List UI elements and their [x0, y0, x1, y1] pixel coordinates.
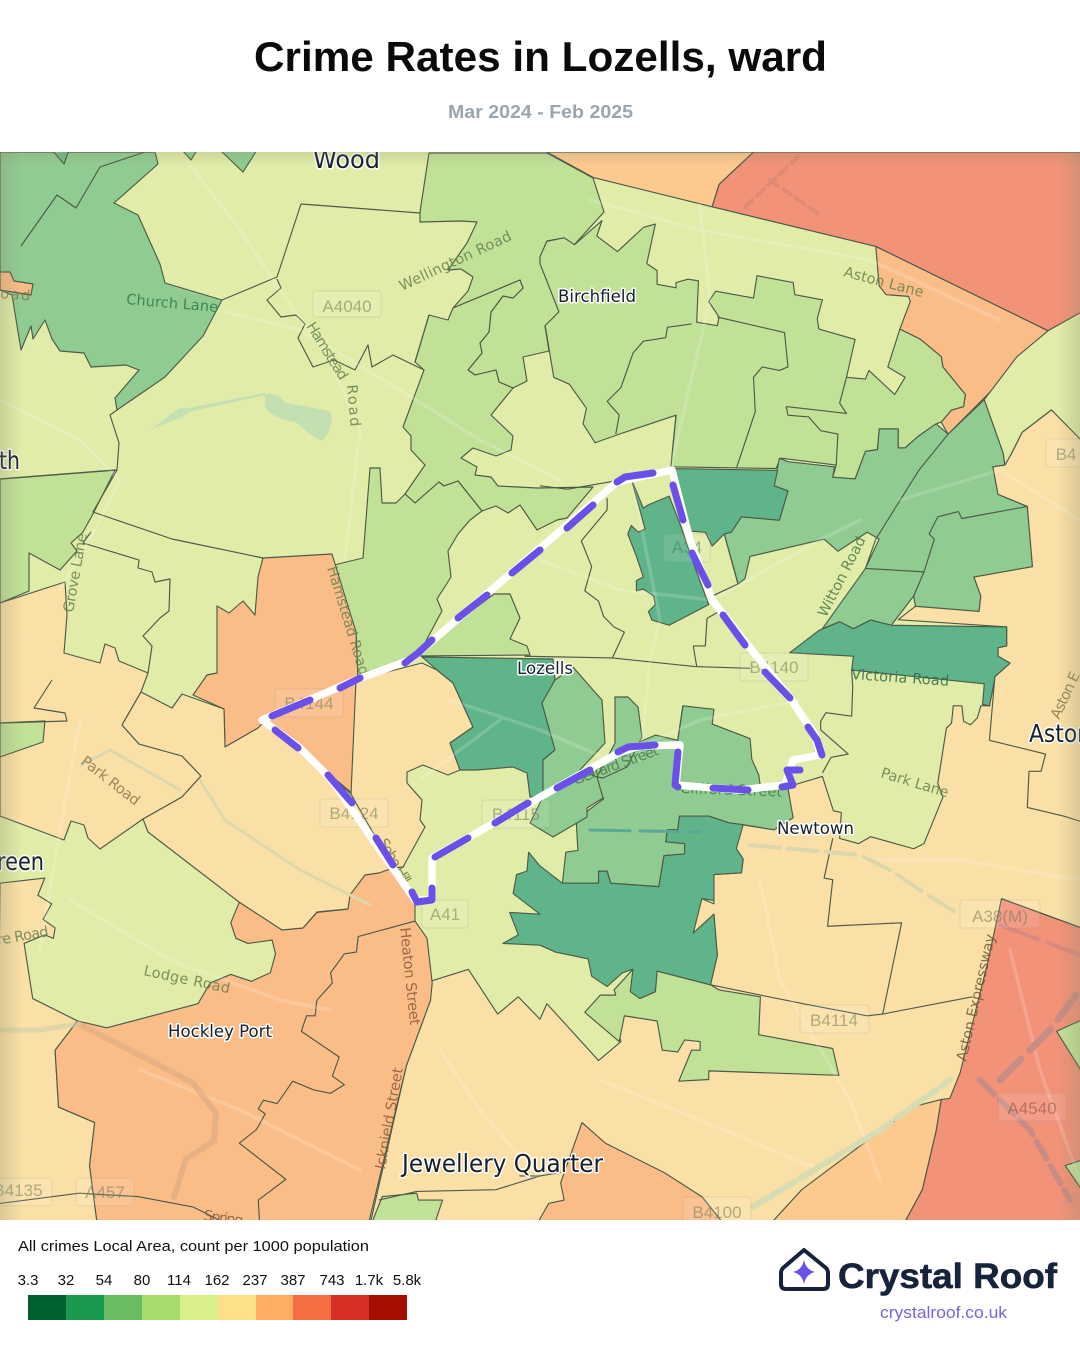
- road number shields: B4115: [492, 805, 540, 824]
- road and canal network: [0, 165, 1080, 1180]
- street name labels: Park Lane: [879, 766, 951, 801]
- road number shields: A457: [85, 1183, 125, 1202]
- place names: Newtown: [777, 819, 854, 839]
- legend heading: All crimes Local Area, count per 1000 population: [18, 1238, 369, 1255]
- street name labels: Aston Expressway: [954, 932, 999, 1063]
- place names: Wood: [313, 145, 380, 174]
- road number shields: A34: [672, 538, 702, 557]
- canals and railway: [0, 155, 1080, 1207]
- road number shields: B4: [1056, 445, 1076, 464]
- road number shields: A4540: [1007, 1099, 1057, 1118]
- road number shields: A41: [430, 905, 460, 924]
- street name labels: Soho Hill: [375, 836, 413, 887]
- title: Crime Rates in Lozells, ward: [254, 33, 827, 80]
- crystal roof logo: [781, 1250, 1057, 1322]
- street name labels: oad: [0, 286, 31, 305]
- street name labels: Hamstead: [303, 320, 351, 383]
- legend colour ramp: [28, 1295, 407, 1320]
- street name labels: Lodge Road: [142, 963, 232, 997]
- road number shields: A4040: [322, 297, 372, 316]
- map edge vignette: [0, 152, 1080, 1220]
- legend scale labels: 114: [167, 1272, 191, 1289]
- street name labels: Witton Road: [815, 534, 870, 620]
- street name labels: Grove Lane: [61, 532, 91, 614]
- street name labels: [0, 229, 1080, 1230]
- ward boundary white casing: [262, 470, 820, 900]
- place names: Lozells: [517, 659, 573, 679]
- logo wordmark: Crystal Roof: [838, 1257, 1057, 1296]
- street name labels: Spring: [202, 1208, 244, 1230]
- map regions: central and western districts: [0, 582, 642, 930]
- legend scale labels: 54: [96, 1272, 112, 1289]
- street name labels: Victoria Road: [851, 667, 950, 690]
- street name labels: Clifford Street: [680, 781, 783, 801]
- place names: Jewellery Quarter: [400, 1149, 604, 1178]
- street name labels: Wellington Road: [397, 229, 514, 295]
- place names: Hockley Port: [168, 1022, 272, 1042]
- map regions: north west: [0, 150, 604, 794]
- road number shields: B4100: [692, 1203, 742, 1222]
- map regions: north east (zoom coordinates): [525, 152, 1080, 668]
- legend scale labels: 237: [242, 1272, 268, 1289]
- road number shields: B4140: [749, 658, 799, 677]
- place names: Birchfield: [558, 287, 636, 307]
- road number shields: A38(M): [972, 907, 1028, 926]
- street name labels: Park Road: [78, 754, 143, 809]
- icon: house with star: [781, 1250, 828, 1289]
- park lake and water features: [152, 393, 331, 441]
- street name labels: Icknield Street: [373, 1066, 407, 1171]
- legend scale labels: 743: [319, 1272, 345, 1289]
- legend scale labels: 5.8k: [393, 1272, 422, 1289]
- legend scale labels: [18, 1272, 422, 1289]
- map regions: south east (zoom coordinates): [368, 410, 1080, 1231]
- road number shields: B4144: [284, 694, 334, 713]
- date range subtitle: Mar 2024 - Feb 2025: [448, 101, 633, 122]
- legend scale labels: 32: [58, 1272, 74, 1289]
- street name labels: Heaton Street: [396, 927, 422, 1026]
- street name labels: Aston Lane: [842, 264, 925, 301]
- legend scale labels: 3.3: [18, 1272, 38, 1289]
- road number shields: B4124: [329, 804, 379, 823]
- legend scale labels: 162: [204, 1272, 230, 1289]
- website url: crystalroof.co.uk: [880, 1303, 1008, 1322]
- ward boundary purple dashes: [272, 473, 822, 902]
- street name labels: Road: [343, 384, 363, 427]
- place names: [0, 145, 1080, 1178]
- road number shields: B4114: [810, 1011, 858, 1030]
- street name labels: Hamstead Road: [323, 564, 372, 677]
- map regions: south west (zoom coordinates): [0, 868, 540, 1231]
- legend scale labels: 80: [134, 1272, 150, 1289]
- street name labels: Gerrard Street: [571, 743, 661, 789]
- street name labels: Church Lane: [126, 292, 219, 316]
- legend scale labels: 1.7k: [355, 1272, 384, 1289]
- legend scale labels: 387: [280, 1272, 306, 1289]
- road number shields: [0, 291, 1080, 1225]
